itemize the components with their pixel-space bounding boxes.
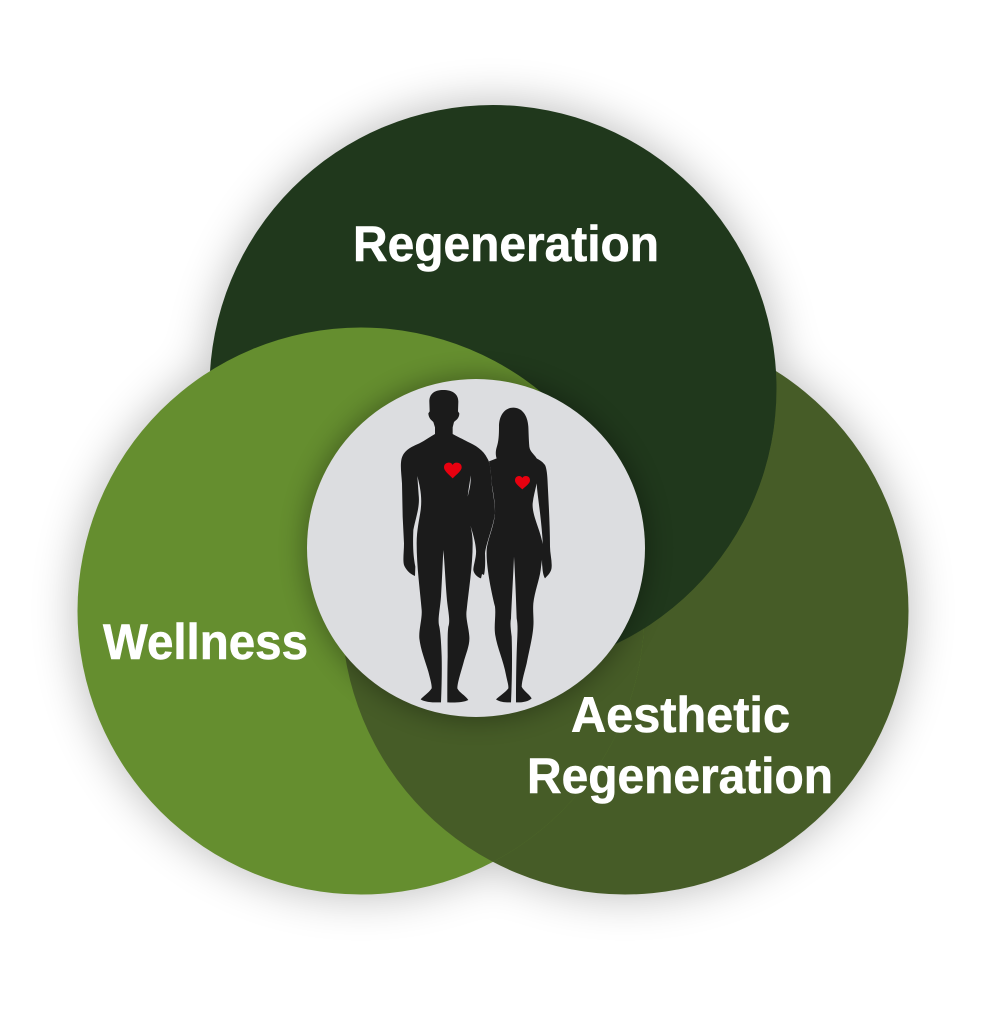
- soft halo behind circles: [75, 102, 911, 897]
- circle: wellness: [78, 328, 644, 894]
- icon: woman's heart: [515, 476, 530, 489]
- label: Wellness: Wellness: [103, 614, 308, 670]
- man silhouette: [401, 390, 495, 702]
- circle: aesthetic regeneration: [342, 328, 908, 894]
- label: Regeneration: Regeneration: [353, 216, 659, 272]
- venn diagram: [52, 80, 934, 920]
- label: Aesthetic Regeneration: Regeneration: [527, 748, 833, 804]
- label: Aesthetic Regeneration: Aesthetic: [571, 687, 790, 743]
- icon: man's heart: [444, 463, 462, 478]
- label: Aesthetic Regeneration: [527, 687, 833, 804]
- centre circle: [307, 379, 645, 717]
- aesthetic circle overlapping wellness: [345, 628, 644, 862]
- regeneration circle overlapping wellness edge: [614, 420, 775, 644]
- woman silhouette: [487, 408, 552, 702]
- shadow of centre circle: [304, 376, 648, 720]
- icon: man and woman silhouettes: [401, 390, 552, 702]
- circle: regeneration: [210, 105, 776, 672]
